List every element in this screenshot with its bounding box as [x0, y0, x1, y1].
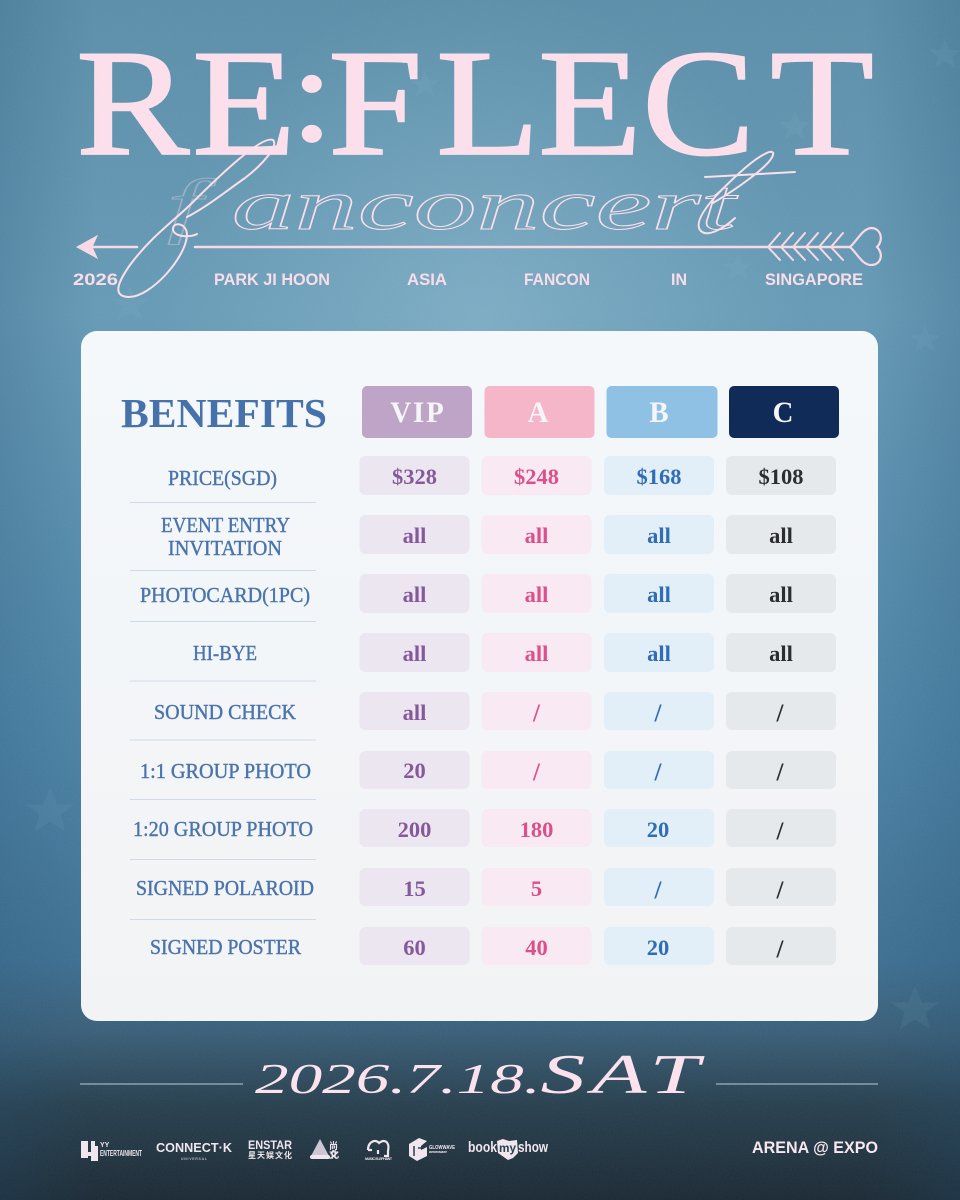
event tagline: FANCON [524, 270, 590, 289]
row: photocard: all [525, 582, 548, 607]
row: event entry invitation: all [647, 523, 671, 548]
row: price: $248 [514, 464, 559, 489]
row: price: PRICE(SGD) [168, 466, 277, 490]
row: signed polaroid [136, 868, 836, 906]
row: sound check: all [403, 700, 426, 725]
subtitle: fanconcert [118, 140, 795, 297]
venue: ARENA @ EXPO [752, 1139, 878, 1157]
logo: Enstar: ENSTAR [248, 1138, 292, 1152]
row: signed poster [150, 927, 836, 965]
logo: YY Entertainment: YY [100, 1142, 110, 1149]
row: hi-bye: all [647, 641, 671, 666]
subtitle: fanconcert: f anconcert [167, 166, 739, 245]
title: RE:FLECT: RE [76, 18, 296, 187]
row: signed polaroid: SIGNED POLAROID [136, 876, 314, 900]
row: photocard: all [769, 582, 793, 607]
row: hi-bye: all [525, 641, 548, 666]
sponsor logos [81, 1138, 548, 1161]
event tagline: ASIA [407, 270, 447, 289]
row: 1:1 group photo: / [654, 759, 663, 786]
row: price: $108 [758, 464, 804, 489]
logo: YY Entertainment: ENTERTAINMENT [100, 1149, 142, 1158]
event tagline: SINGAPORE [765, 270, 863, 289]
row dividers [130, 502, 316, 920]
event tagline: PARK JI HOON [214, 270, 330, 289]
row: 1:1 group photo: 20 [403, 758, 426, 783]
row: sound check: / [776, 700, 785, 727]
row: 1:1 group photo: / [776, 759, 785, 786]
row: hi-bye: all [403, 641, 426, 666]
row: sound check: / [654, 700, 663, 727]
row: hi-bye: all [769, 641, 793, 666]
row: 1:20 group photo: / [776, 818, 785, 845]
logo: triangle mark: 文化 [329, 1149, 339, 1160]
row: sound check [154, 692, 836, 730]
row: signed poster: SIGNED POSTER [150, 935, 301, 959]
row: event entry invitation: EVENT ENTRY [161, 513, 290, 537]
logo: BookMyShow: book [468, 1139, 498, 1156]
row: signed poster: 20 [647, 935, 669, 960]
tier headers [362, 386, 839, 438]
logo: Glowwave [409, 1138, 456, 1161]
row: 1:1 group photo: / [532, 759, 541, 786]
row: signed polaroid: 5 [531, 876, 542, 901]
row: event entry invitation: all [769, 523, 793, 548]
row: signed polaroid: / [776, 877, 785, 904]
row: event entry invitation: all [525, 523, 548, 548]
row: 1:1 group photo: 1:1 GROUP PHOTO [140, 759, 311, 783]
flourish: long f loop and t loop with crossbar [118, 140, 795, 297]
row: hi-bye: HI-BYE [193, 641, 257, 665]
logo: YY Entertainment [81, 1141, 142, 1161]
title: RE:FLECT: FLECT [328, 18, 874, 187]
logo: Glowwave: ENTERTAINMENT [429, 1151, 447, 1154]
row: signed poster: 40 [525, 935, 548, 960]
row: sound check: / [532, 700, 541, 727]
logo: Music Elephant [365, 1141, 393, 1161]
tier headers: B [649, 396, 669, 429]
row: event entry invitation: all [403, 523, 426, 548]
logo: BookMyShow [468, 1139, 548, 1160]
row: price [168, 456, 836, 495]
row: 1:20 group photo: 1:20 GROUP PHOTO [133, 817, 313, 841]
row: photocard: all [647, 582, 671, 607]
event tagline: IN [671, 270, 687, 289]
logo: Glowwave: GLOWWAVE [429, 1145, 456, 1151]
panel: benefits table [81, 331, 878, 1021]
title: RE:FLECT: : [291, 19, 333, 170]
logo: Enstar: 星天娱文化 [248, 1150, 292, 1160]
event tagline: 2026 [73, 270, 118, 289]
row: 1:20 group photo: 180 [520, 817, 553, 842]
row: price: $168 [636, 464, 682, 489]
row: photocard: PHOTOCARD(1PC) [140, 583, 310, 607]
logo: BookMyShow: show [518, 1139, 548, 1156]
tier headers: C [773, 396, 793, 429]
date: 2026.7.18.SAT [255, 1044, 706, 1106]
logo: triangle mark: 尚 [329, 1140, 338, 1151]
tier headers: A [528, 396, 549, 429]
tier headers: VIP [390, 396, 446, 429]
row: event entry invitation [161, 513, 836, 560]
row: price: $328 [392, 464, 437, 489]
row: 1:20 group photo: 200 [398, 817, 431, 842]
row: signed poster: / [776, 936, 785, 963]
row: signed poster: 60 [403, 935, 426, 960]
row: hi-bye [193, 633, 836, 672]
row: 1:1 group photo [140, 751, 836, 789]
row: signed polaroid: 15 [403, 876, 426, 901]
logo: triangle mark [310, 1139, 339, 1160]
row: 1:20 group photo: 20 [647, 817, 669, 842]
row: sound check: SOUND CHECK [154, 700, 296, 724]
event tagline [73, 270, 863, 289]
heading: benefits: BENEFITS [121, 390, 327, 436]
row: photocard: all [403, 582, 426, 607]
row: photocard [140, 574, 836, 613]
logo: Enstar [248, 1138, 292, 1160]
logo: BookMyShow: my [499, 1141, 516, 1155]
row: signed polaroid: / [654, 877, 663, 904]
row: event entry invitation: INVITATION [168, 536, 282, 560]
logo: Connect-K: UNIVERSAL [181, 1157, 208, 1161]
logo: Connect-K: CONNECT·K [156, 1140, 233, 1155]
logo: Music Elephant: MUSIC ELEPHANT [365, 1157, 393, 1161]
arrow with heart fletching [77, 228, 881, 265]
row: 1:20 group photo [133, 809, 836, 847]
